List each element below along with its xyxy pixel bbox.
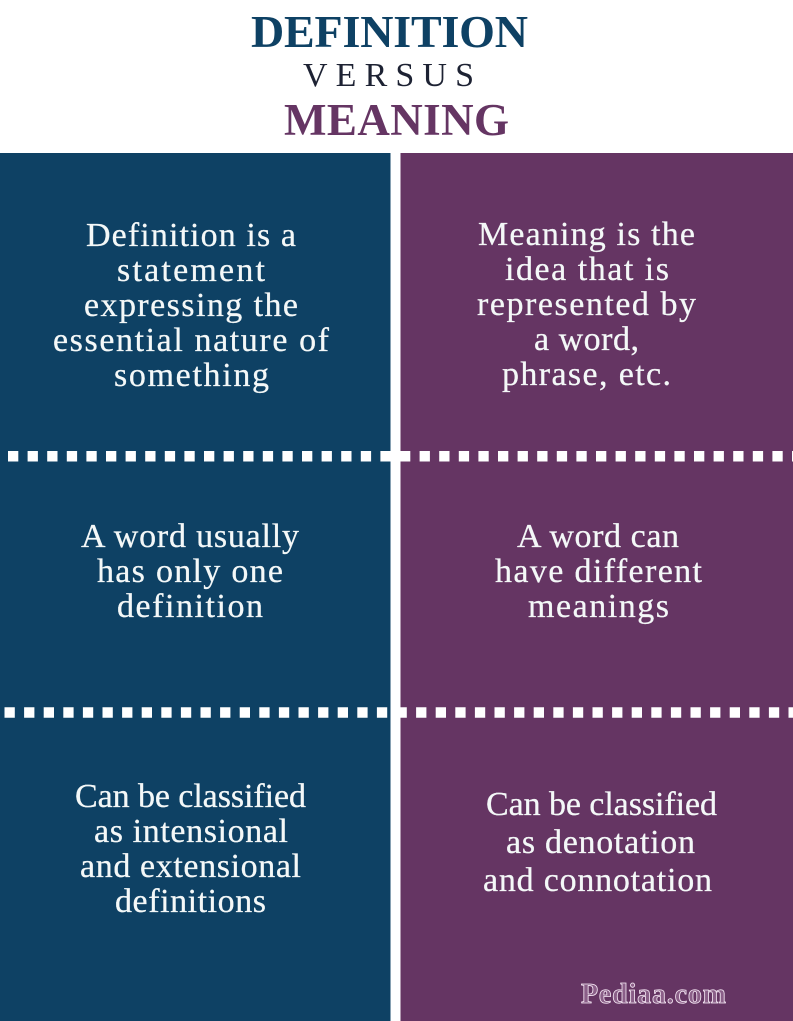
text block: different meanings: A word can	[517, 518, 679, 555]
text block: definition classes: Can be classified	[75, 778, 306, 815]
text block: meaning statement: represented by	[477, 286, 696, 323]
text block: meaning statement	[477, 216, 696, 393]
title	[251, 6, 528, 145]
text block: one definition: has only one	[97, 553, 283, 590]
text block: meaning classes: and connotation	[483, 862, 712, 899]
text block: meaning statement: Meaning is the	[478, 216, 695, 253]
text block: definition classes	[75, 778, 306, 920]
text block: meaning statement: a word,	[534, 321, 639, 358]
heading: versus: VERSUS	[303, 57, 474, 94]
text block: meaning classes: Can be classified	[486, 786, 717, 823]
text block: one definition	[81, 518, 299, 625]
text block: definition statement	[53, 217, 330, 394]
heading: definition: DEFINITION	[251, 6, 528, 57]
text block: definition classes: definitions	[115, 883, 266, 920]
text block: definition statement: expressing the	[84, 287, 298, 324]
text block: different meanings: meanings	[528, 588, 669, 625]
text block: different meanings: have different	[495, 553, 703, 590]
panel: definition column	[0, 153, 390, 1021]
text block: definition classes: as intensional	[94, 813, 288, 850]
logo: Pediaa.com: Pediaa.com	[581, 979, 726, 1010]
text block: definition statement: something	[114, 357, 269, 394]
text block: definition classes: and extensional	[80, 848, 301, 885]
text block: meaning classes: as denotation	[506, 824, 695, 861]
text block: one definition: definition	[117, 588, 263, 625]
panel: meaning column	[400, 153, 793, 1021]
text block: definition statement: essential nature of	[53, 322, 330, 359]
text block: definition statement: Definition is a	[86, 217, 296, 254]
text block: different meanings	[495, 518, 703, 625]
text block: meaning statement: phrase, etc.	[502, 356, 671, 393]
text block: one definition: A word usually	[81, 518, 299, 555]
text block: meaning statement: idea that is	[505, 251, 669, 288]
text block: meaning classes	[483, 786, 717, 899]
text block: definition statement: statement	[117, 252, 266, 289]
heading: meaning: MEANING	[284, 95, 509, 145]
